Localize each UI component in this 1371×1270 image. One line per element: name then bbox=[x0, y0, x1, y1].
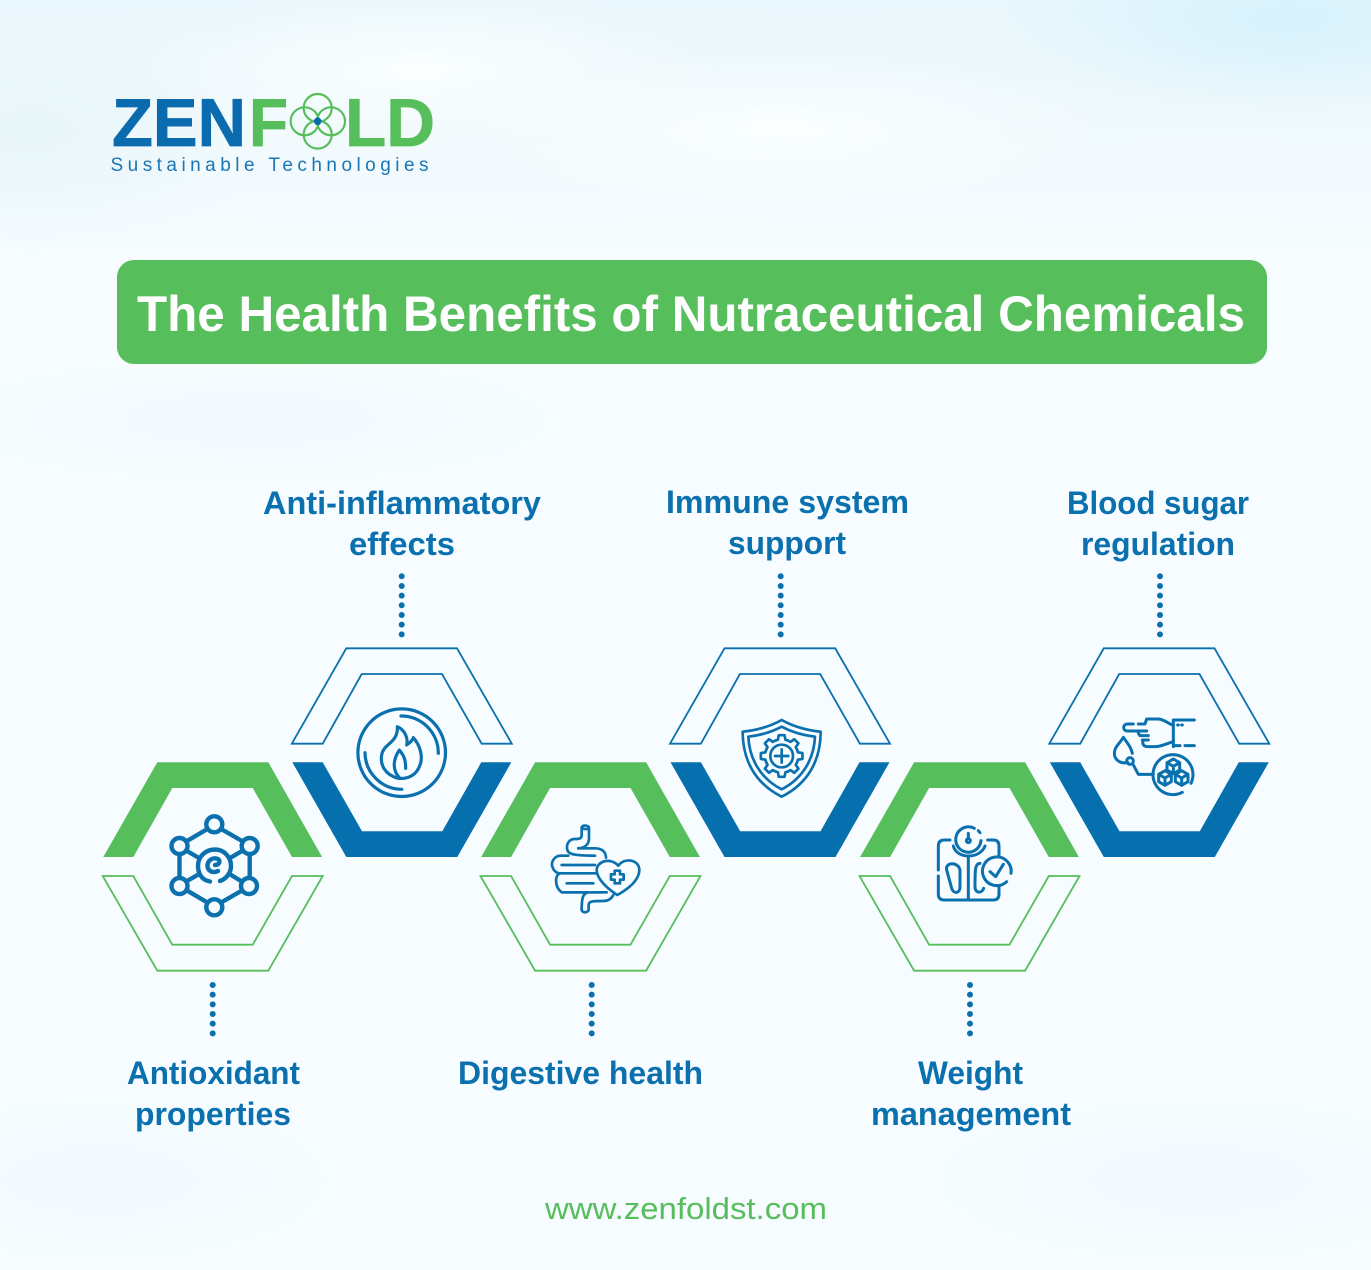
connector: antioxidant dots bbox=[210, 985, 216, 1036]
logo letter F: F bbox=[249, 85, 288, 161]
icon: weighing scale with check bbox=[938, 827, 1011, 900]
label: antioxidant properties: properties bbox=[135, 1096, 291, 1132]
label: anti-inflammatory effects: Anti-inflammatory bbox=[263, 485, 541, 521]
title: The Health Benefits of Nutraceutical Chemicals bbox=[137, 285, 1245, 342]
icon: flame bbox=[358, 709, 446, 796]
panel: blood sugar hexagon bbox=[1049, 648, 1269, 857]
label: weight management: management bbox=[871, 1096, 1071, 1132]
logo letters LD: LD bbox=[345, 85, 435, 161]
connector: immune system dots bbox=[778, 576, 784, 636]
title banner bbox=[117, 260, 1267, 364]
connector: anti-inflammatory dots bbox=[399, 576, 405, 636]
connector: weight management dots bbox=[967, 985, 973, 1036]
green outlined lower band bbox=[480, 876, 700, 971]
label: antioxidant properties bbox=[127, 1055, 300, 1132]
green filled top band bbox=[103, 762, 322, 857]
label: antioxidant properties: Antioxidant bbox=[127, 1055, 300, 1091]
logo flower mark bbox=[291, 94, 345, 149]
green outlined lower band bbox=[103, 876, 323, 971]
label: digestive health: Digestive health bbox=[458, 1055, 703, 1091]
icon: intestine with heart bbox=[552, 826, 639, 912]
label: anti-inflammatory effects bbox=[263, 485, 541, 562]
panel: antioxidant hexagon bbox=[103, 762, 323, 971]
blue outlined upper band bbox=[670, 648, 890, 744]
panel: anti-inflammatory hexagon bbox=[292, 648, 512, 857]
label: immune system support bbox=[666, 484, 909, 561]
logo tagline: Sustainable Technologies bbox=[110, 155, 428, 176]
blue filled lower band bbox=[1050, 762, 1269, 857]
label: immune system support: support bbox=[728, 525, 846, 561]
panel: digestive health hexagon bbox=[480, 762, 700, 971]
label: immune system support: Immune system bbox=[666, 484, 909, 520]
label: blood sugar regulation bbox=[1067, 485, 1249, 562]
label: anti-inflammatory effects: effects bbox=[349, 526, 455, 562]
green filled top band bbox=[860, 762, 1079, 857]
connector: blood sugar dots bbox=[1157, 576, 1163, 636]
label: blood sugar regulation: regulation bbox=[1081, 526, 1235, 562]
icon: shield with gear bbox=[743, 720, 821, 797]
panel: immune system hexagon bbox=[670, 648, 890, 857]
blue filled lower band bbox=[670, 762, 890, 857]
footer website: www.zenfoldst.com bbox=[544, 1191, 827, 1226]
label: weight management bbox=[871, 1055, 1071, 1132]
connector: digestive health dots bbox=[589, 985, 595, 1036]
green outlined lower band bbox=[860, 876, 1080, 971]
logo word ZEN: ZEN bbox=[112, 85, 246, 161]
panel: weight management hexagon bbox=[860, 762, 1080, 971]
green filled top band bbox=[481, 762, 700, 857]
icon: blood sugar test bbox=[1114, 719, 1194, 795]
logo: Zenfold Sustainable Technologies bbox=[110, 85, 435, 176]
label: blood sugar regulation: Blood sugar bbox=[1067, 485, 1249, 521]
blue outlined upper band bbox=[292, 648, 512, 744]
blue filled lower band bbox=[292, 762, 511, 857]
icon: molecule bbox=[172, 816, 258, 915]
blue outlined upper band bbox=[1049, 648, 1269, 744]
label: weight management: Weight bbox=[918, 1055, 1023, 1091]
